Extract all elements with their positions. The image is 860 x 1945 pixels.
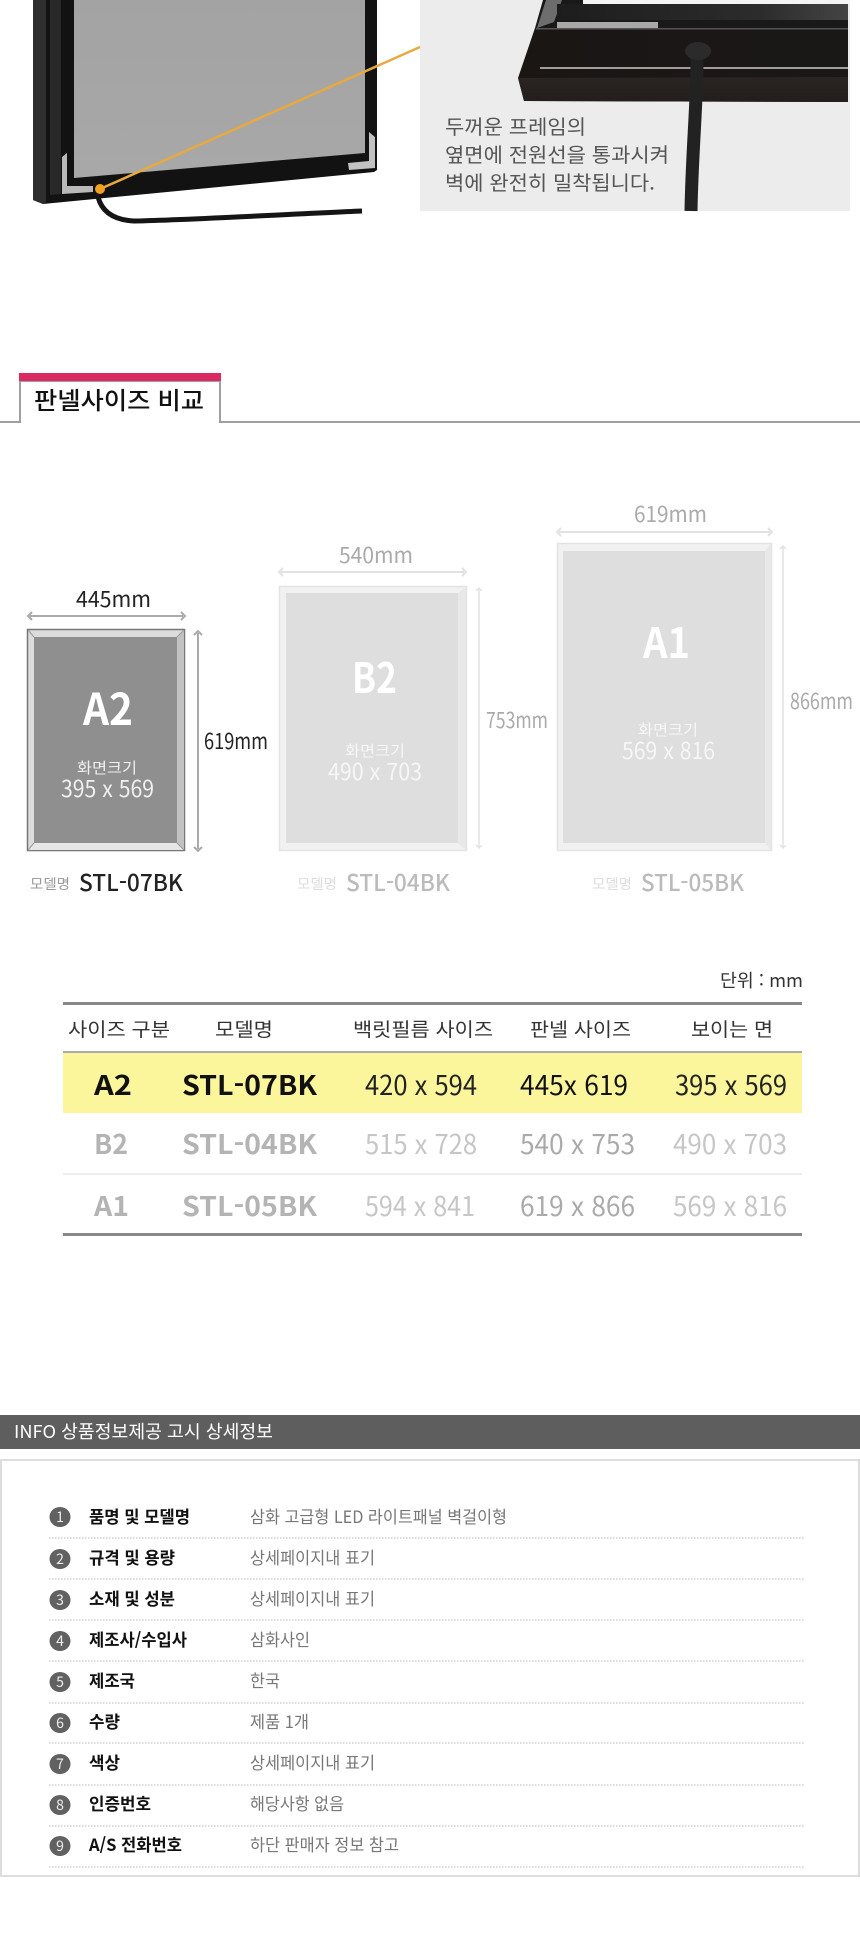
row: A1: 594 x 841 [365, 1185, 475, 1224]
panel: product information notice [1, 1460, 859, 1876]
screen size: 화면크기 [345, 740, 405, 761]
heading: panel size comparison: 판넬사이즈 비교 [34, 381, 204, 416]
detail photo: frame body [518, 28, 848, 102]
dimension text: 753mm: 753mm [486, 703, 548, 735]
row: B2: 490 x 703 [673, 1123, 787, 1162]
size name: A2 [82, 674, 133, 738]
row: A2: 445x 619 [520, 1064, 628, 1103]
dimension arrow: width [28, 612, 185, 620]
model name [297, 864, 451, 898]
panel: product frame photo [33, 0, 377, 221]
row 6 [50, 1708, 309, 1733]
row 5: 한국 [250, 1667, 280, 1692]
row 2 [50, 1544, 375, 1569]
panel: A2 size diagram [28, 582, 268, 898]
model name [30, 864, 184, 898]
row: A1 [93, 1185, 787, 1224]
row: B2: STL-04BK [182, 1123, 317, 1162]
row 4 [50, 1626, 310, 1651]
model name: 모델명 [297, 874, 337, 894]
frame [558, 544, 772, 850]
dotted row dividers [49, 1538, 804, 1867]
panel: A1 size diagram [557, 497, 853, 898]
screen size: 490 x 703 [328, 753, 422, 787]
table header [68, 1015, 773, 1042]
row: A1: 619 x 866 [520, 1185, 635, 1224]
row 1: 삼화 고급형 LED 라이트패널 벽걸이형 [250, 1503, 507, 1528]
row 8 [50, 1790, 344, 1815]
row 5: 5 [56, 1672, 64, 1692]
row 3 [50, 1585, 375, 1610]
row: A2: STL-07BK [182, 1064, 317, 1103]
callout panel: cable detail [420, 0, 850, 211]
row 7: 7 [56, 1754, 64, 1774]
row: A1: STL-05BK [182, 1185, 317, 1224]
screen size: 395 x 569 [61, 770, 154, 804]
row 9: 9 [56, 1836, 64, 1856]
row 1: 1 [56, 1507, 64, 1527]
row 7 [50, 1749, 375, 1774]
row 6: 수량 [89, 1708, 120, 1733]
model name: 모델명 [592, 874, 632, 894]
row: B2 [94, 1123, 787, 1162]
row 5: 제조국 [89, 1667, 135, 1692]
row 1 [50, 1503, 507, 1528]
grey screen [74, 0, 365, 178]
screen size: 화면크기 [638, 719, 698, 740]
dimension arrow: width [279, 568, 466, 576]
table rules [63, 1002, 802, 1236]
size name: B2 [352, 645, 397, 706]
size name: A1 [642, 610, 690, 671]
screen size [622, 719, 715, 766]
model name: 모델명 [30, 874, 70, 894]
row 5 [50, 1667, 280, 1692]
detail photo: frame face [518, 77, 848, 102]
callout text [445, 111, 669, 196]
black frame [33, 0, 377, 204]
row 6: 6 [56, 1713, 64, 1733]
row 1: 품명 및 모델명 [89, 1503, 190, 1528]
row 3: 상세페이지내 표기 [250, 1585, 375, 1610]
row 2: 상세페이지내 표기 [250, 1544, 375, 1569]
model name: STL-07BK [79, 864, 184, 898]
frame [28, 630, 184, 850]
row: B2: 515 x 728 [365, 1123, 477, 1162]
row 9 [50, 1831, 399, 1856]
dimension arrow: height [476, 588, 482, 848]
table header: 판넬 사이즈 [530, 1015, 631, 1042]
dimension text: 540mm: 540mm [339, 538, 413, 570]
row 6: 제품 1개 [250, 1708, 309, 1733]
row 2: 규격 및 용량 [89, 1544, 175, 1569]
row 3: 3 [56, 1590, 64, 1610]
row: A1: 569 x 816 [673, 1185, 787, 1224]
row 8: 인증번호 [89, 1790, 151, 1815]
frame side highlight inner [50, 0, 61, 195]
row: A2: 420 x 594 [365, 1064, 477, 1103]
model name: STL-05BK [641, 864, 745, 898]
dimension text: 619mm: 619mm [204, 724, 268, 756]
model name: STL-04BK [346, 864, 451, 898]
row: A2: A2 [93, 1064, 132, 1103]
row: A1: A1 [93, 1185, 129, 1224]
row 7: 상세페이지내 표기 [250, 1749, 375, 1774]
callout text: 두꺼운 프레임의 [445, 111, 586, 140]
panel: B2 size diagram [279, 538, 548, 898]
arrow: orange leader line [95, 47, 420, 194]
unit label: 단위 : mm [720, 967, 803, 993]
frame side highlight [33, 0, 46, 204]
icon: power cable [98, 197, 362, 221]
silver corner bracket right [348, 132, 375, 170]
heading: panel size comparison [0, 373, 860, 422]
row 3: 소재 및 성분 [89, 1585, 175, 1610]
row 8: 8 [56, 1795, 64, 1815]
highlighted row background [63, 1053, 802, 1113]
table header: 백릿필름 사이즈 [353, 1015, 493, 1042]
row 8: 해당사항 없음 [250, 1790, 344, 1815]
detail photo: cable grommet [685, 42, 711, 60]
table header: 보이는 면 [691, 1015, 773, 1042]
row 7: 색상 [89, 1749, 120, 1774]
dimension arrow: height [780, 546, 786, 848]
model name [592, 864, 745, 898]
silver corner bracket left [62, 153, 93, 194]
detail photo: groove [540, 67, 848, 69]
row 2: 2 [56, 1549, 64, 1569]
frame [280, 586, 466, 850]
row 4: 제조사/수입사 [89, 1626, 187, 1651]
screen size: 569 x 816 [622, 732, 715, 766]
callout text: 옆면에 전원선을 통과시켜 [445, 139, 669, 168]
row: A2: 395 x 569 [675, 1064, 787, 1103]
screen size [61, 757, 154, 804]
detail photo: inner recess [557, 4, 848, 20]
detail photo: cable [691, 50, 697, 211]
row 4: 삼화사인 [250, 1626, 310, 1651]
dimension arrow: height [194, 631, 202, 851]
row: B2: 540 x 753 [520, 1123, 635, 1162]
dimension text: 619mm: 619mm [634, 497, 707, 529]
table: size comparison [63, 1002, 802, 1236]
row 4: 4 [56, 1631, 64, 1651]
detail photo: white panel edge [583, 0, 850, 4]
screen size [328, 740, 422, 787]
heading: info bar [0, 1415, 860, 1449]
screen size: 화면크기 [77, 757, 137, 778]
row: B2: B2 [94, 1123, 128, 1162]
detail photo: silver edge [537, 0, 562, 28]
heading: info bar: INFO 상품정보제공 고시 상세정보 [14, 1418, 273, 1444]
table header: 사이즈 구분 [68, 1015, 170, 1042]
row 9: 하단 판매자 정보 참고 [250, 1831, 399, 1856]
row: A2 [93, 1064, 787, 1103]
dimension text: 445mm: 445mm [76, 582, 151, 614]
dimension arrow: width [557, 528, 772, 536]
row 9: A/S 전화번호 [88, 1831, 182, 1856]
detail photo: bracket [557, 22, 658, 28]
detail photo: dark upper frame [535, 0, 848, 28]
table header: 모델명 [215, 1015, 273, 1042]
callout text: 벽에 완전히 밀착됩니다. [445, 167, 655, 196]
detail photo: frame top edge [536, 28, 848, 30]
